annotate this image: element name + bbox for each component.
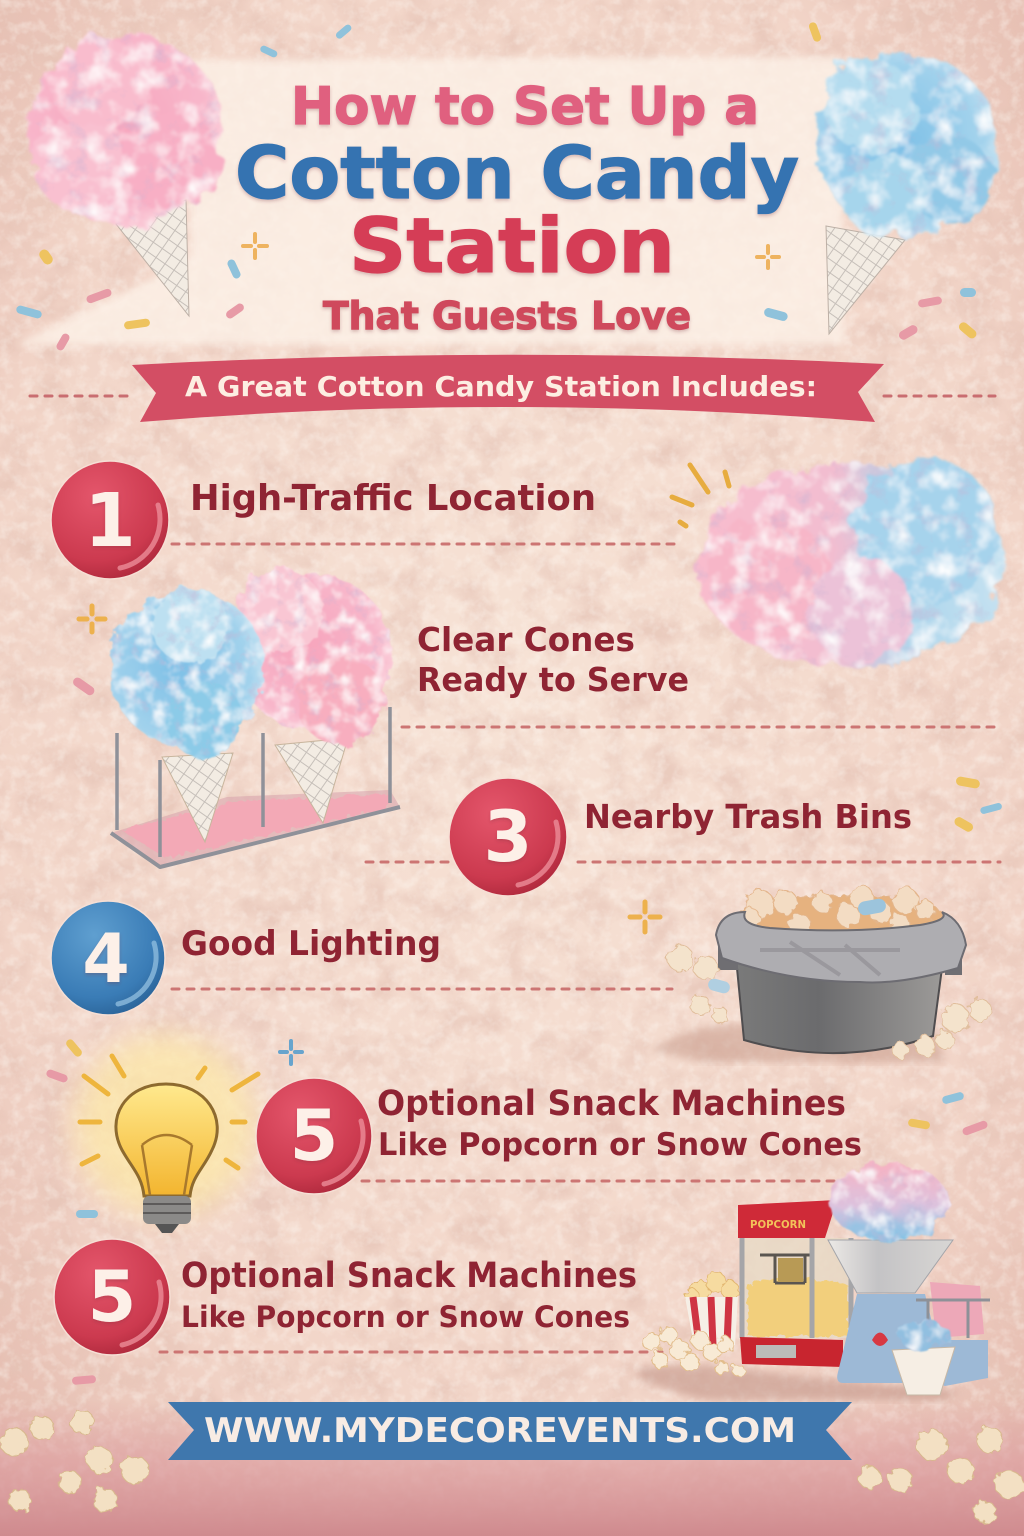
title backdrop <box>15 56 845 345</box>
item 3: nearby trash bins <box>366 778 1000 896</box>
item 3: nearby trash bins: 3 <box>484 796 532 878</box>
item 5: optional snack machines, lower <box>54 1239 662 1355</box>
banner: website <box>168 1402 852 1460</box>
title: How to Set Up a <box>291 77 759 137</box>
title: That Guests Love <box>323 294 691 338</box>
item 1: high-traffic location <box>51 461 680 579</box>
item 5: optional snack machines, upper <box>256 1078 862 1194</box>
icon: popcorn machine and snow cone maker <box>640 1164 990 1400</box>
icon: popcorn machine and snow cone maker: POPCORN <box>750 1218 806 1231</box>
banner: includes: A Great Cotton Candy Station Includes: <box>185 370 817 403</box>
title: Station <box>349 201 675 290</box>
item 4: good lighting <box>51 901 672 1015</box>
item 2: clear cones <box>402 620 1000 727</box>
banner: website: WWW.MYDECOREVENTS.COM <box>204 1411 796 1451</box>
icon: cones in clear stand <box>109 568 400 867</box>
icon: blue cotton candy cone <box>816 53 996 334</box>
icon: light bulb <box>75 1035 258 1233</box>
icon: pink and blue cotton candy cloud <box>672 458 1005 667</box>
item 5: optional snack machines, upper: 5 <box>290 1095 338 1177</box>
banner: includes <box>30 355 995 422</box>
item 5: optional snack machines, lower: Optional Snack Machines <box>181 1256 637 1296</box>
item 1: high-traffic location: High-Traffic Location <box>190 478 596 519</box>
item 2: clear cones: Clear Cones <box>417 620 635 659</box>
item 3: nearby trash bins: Nearby Trash Bins <box>584 797 912 836</box>
item 5: optional snack machines, lower: 5 <box>88 1256 136 1338</box>
title <box>235 77 799 338</box>
item 4: good lighting: Good Lighting <box>181 924 441 964</box>
item 4: good lighting: 4 <box>82 920 130 999</box>
item 5: optional snack machines, lower: Like Popcorn or Snow Cones <box>181 1300 630 1334</box>
item 5: optional snack machines, upper: Like Popcorn or Snow Cones <box>378 1127 862 1163</box>
title: Cotton Candy <box>235 131 799 215</box>
popcorn border <box>0 1410 1024 1523</box>
icon: pink cotton candy cone <box>30 34 222 316</box>
item 5: optional snack machines, upper: Optional Snack Machines <box>377 1084 846 1124</box>
icon: trash bin with popcorn <box>650 886 991 1062</box>
item 2: clear cones: Ready to Serve <box>417 660 689 699</box>
item 1: high-traffic location: 1 <box>84 478 136 564</box>
